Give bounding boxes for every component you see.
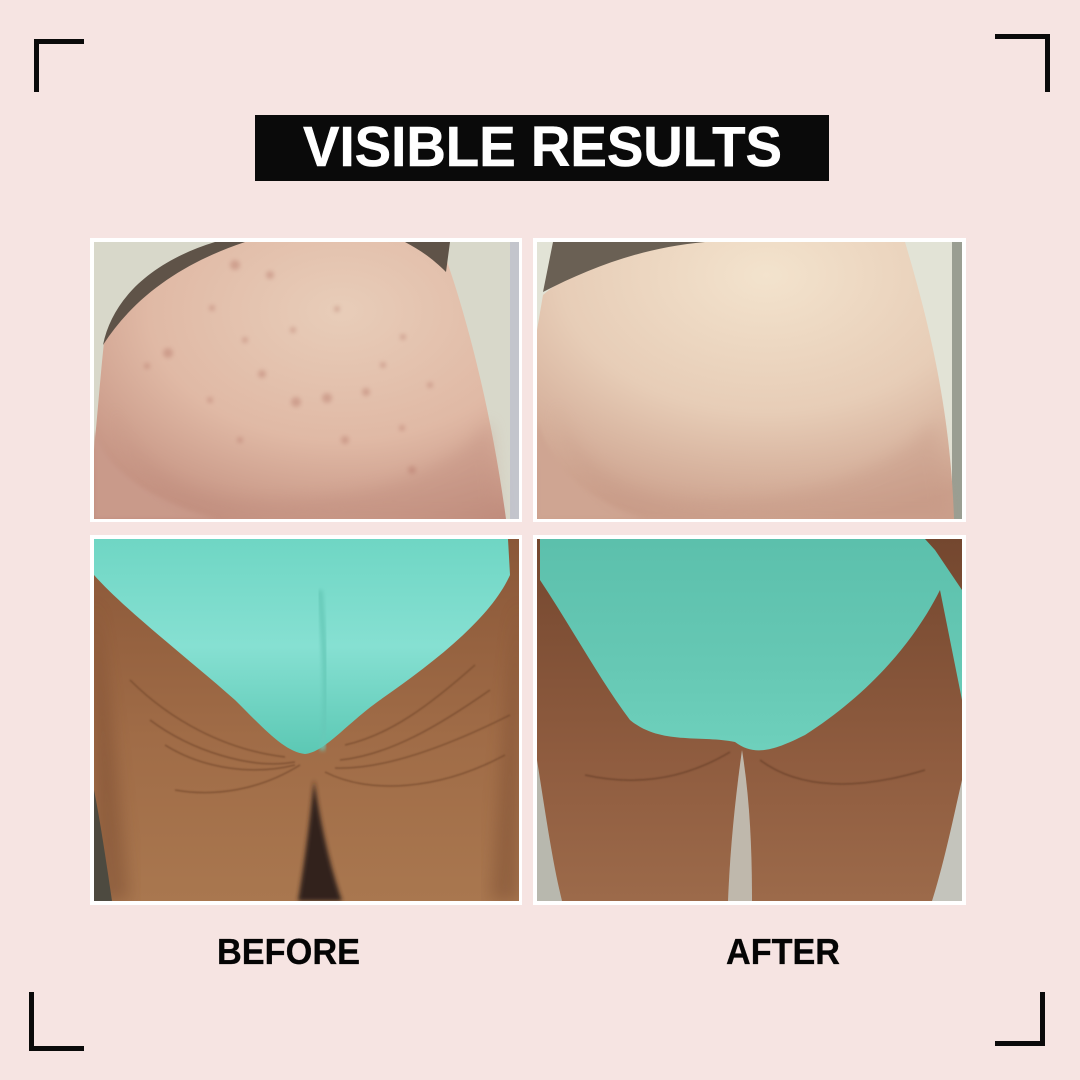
label: before: BEFORE <box>217 931 360 972</box>
photo: after, rear view <box>533 535 966 905</box>
photo: before, rear view <box>90 535 522 905</box>
corner bracket: top left <box>36 42 84 92</box>
corner bracket: bottom right <box>995 992 1042 1044</box>
photo: after, upper view <box>533 238 966 522</box>
corner bracket: bottom left <box>32 992 84 1048</box>
label: after: AFTER <box>726 931 840 972</box>
title: VISIBLE RESULTS <box>303 115 782 179</box>
corner bracket: top right <box>995 36 1048 92</box>
photo: before, upper view <box>90 238 522 522</box>
